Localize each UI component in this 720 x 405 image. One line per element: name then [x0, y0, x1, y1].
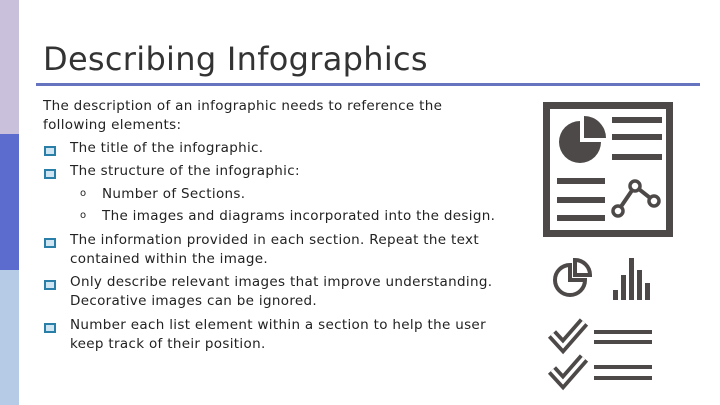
body text: Only describe relevant images that improve understanding. — [70, 274, 492, 290]
body text — [42, 98, 495, 352]
body text: The information provided in each section. Repeat the text — [70, 232, 479, 248]
body text: keep track of their position. — [70, 336, 266, 352]
icon: checklist — [552, 322, 652, 382]
body text: contained within the image. — [70, 251, 268, 267]
body text: The description of an infographic needs to reference the — [43, 98, 442, 114]
body text: Decorative images can be ignored. — [70, 293, 317, 309]
icon: pie and bar chart — [555, 258, 650, 300]
body text: o — [80, 210, 86, 221]
body text: Number of Sections. — [102, 186, 245, 202]
body text: following elements: — [43, 117, 181, 133]
body text: o — [80, 188, 86, 199]
icon: infographic document — [546, 106, 670, 234]
side strip — [0, 0, 19, 405]
body text: Number each list element within a section to help the user — [70, 317, 486, 333]
title underline — [36, 83, 700, 86]
body text: The structure of the infographic: — [70, 163, 300, 179]
body text: The images and diagrams incorporated into the design. — [102, 208, 495, 224]
body text: The title of the infographic. — [70, 140, 263, 156]
title: Describing Infographics — [43, 40, 428, 78]
